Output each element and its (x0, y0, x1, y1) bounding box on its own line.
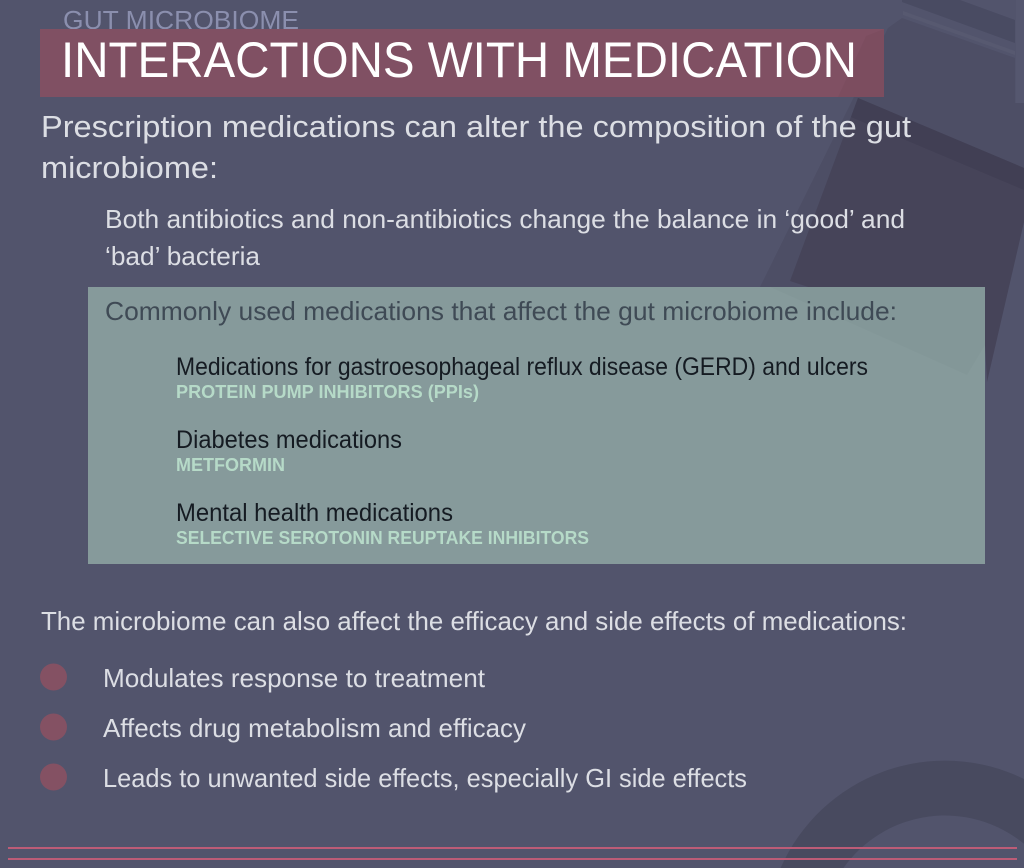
panel heading: Commonly used medications that affect the gut microbiome include: (105, 296, 897, 326)
intro text (41, 109, 911, 185)
medication group: GERD and ulcers: Medications for gastroesophageal reflux disease (GERD) and ulcers (176, 353, 868, 381)
sub-point text (105, 204, 905, 271)
medication group: diabetes: Diabetes medications (176, 426, 402, 454)
bullet list (40, 663, 747, 793)
bullet: treatment response: Modulates response to treatment (103, 663, 486, 693)
medication group: GERD and ulcers: PROTEIN PUMP INHIBITORS (PPIs) (176, 382, 479, 402)
intro text: microbiome: (41, 150, 218, 185)
bullet: drug metabolism: Affects drug metabolism and efficacy (103, 713, 526, 743)
sub-point text: Both antibiotics and non-antibiotics change the balance in ‘good’ and (105, 204, 905, 234)
panel: common medications (88, 287, 985, 564)
background: faded ring (781, 761, 1024, 868)
medication group: diabetes (176, 426, 402, 475)
efficacy statement: The microbiome can also affect the efficacy and side effects of medications: (41, 606, 907, 636)
medication group: GERD and ulcers (176, 353, 868, 402)
title banner: INTERACTIONS WITH MEDICATION (61, 32, 857, 88)
medication group: mental health: Mental health medications (176, 499, 453, 527)
intro text: Prescription medications can alter the composition of the gut (41, 109, 911, 144)
sub-point text: ‘bad’ bacteria (105, 241, 261, 271)
medication group: diabetes: METFORMIN (176, 455, 285, 475)
medication group: mental health (176, 499, 589, 548)
medication group: mental health: SELECTIVE SEROTONIN REUPTAKE INHIBITORS (176, 528, 589, 548)
bullet: side effects: Leads to unwanted side effects, especially GI side effects (103, 763, 747, 793)
background: faded medical device shapes (760, 0, 1024, 382)
eyebrow heading: GUT MICROBIOME (63, 5, 299, 35)
